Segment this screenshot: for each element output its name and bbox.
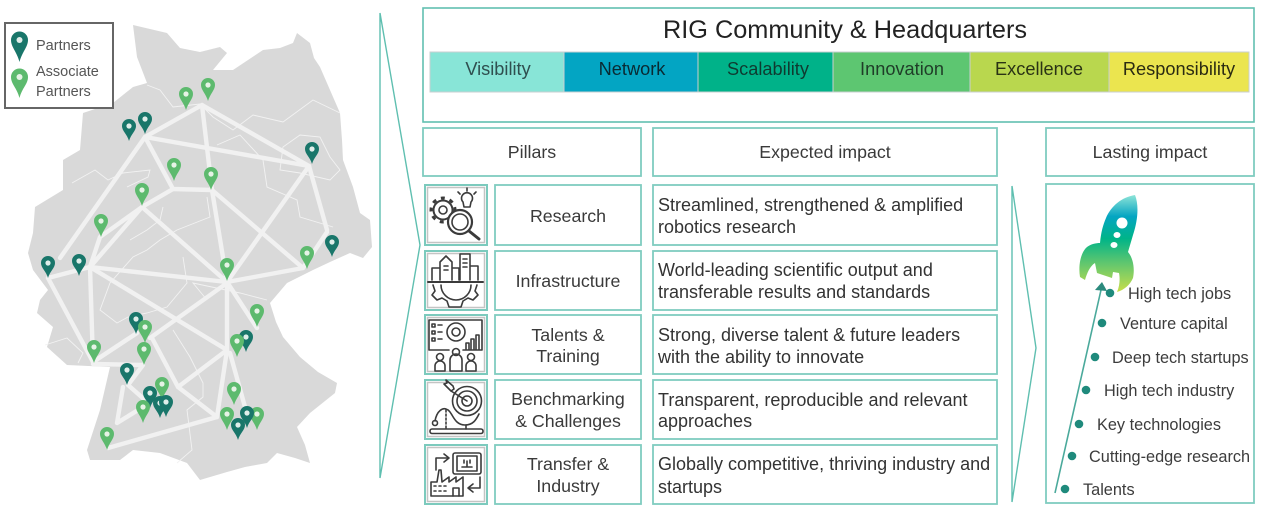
impact text: robotics research bbox=[658, 217, 796, 237]
list: lasting impact items: High tech industry bbox=[1104, 382, 1235, 400]
impact text bbox=[653, 445, 997, 504]
arrow: growth bbox=[1055, 282, 1107, 493]
arrow: map to community chevron bbox=[380, 13, 420, 478]
impact text: approaches bbox=[658, 411, 752, 431]
values bar: Network bbox=[599, 59, 666, 79]
legend labels: Associate bbox=[36, 64, 99, 80]
label: Infrastructure bbox=[516, 271, 620, 291]
heading: Expected impact: Expected impact bbox=[759, 142, 891, 162]
partner pins bbox=[41, 78, 339, 450]
values bar: Visibility bbox=[465, 59, 532, 79]
label: Talents & bbox=[531, 325, 605, 345]
icon: research bbox=[425, 185, 487, 245]
list: lasting impact items: Deep tech startups bbox=[1112, 349, 1249, 367]
heading: Pillars bbox=[423, 128, 641, 176]
impact text: transferable results and standards bbox=[658, 282, 930, 302]
values bar: Excellence bbox=[995, 59, 1083, 79]
label bbox=[495, 185, 641, 245]
icon: associate partner pin bbox=[11, 68, 28, 98]
heading: Expected impact bbox=[653, 128, 997, 176]
row: Research bbox=[425, 185, 997, 245]
impact text: startups bbox=[658, 477, 722, 497]
list: lasting impact items bbox=[1061, 285, 1250, 499]
label bbox=[495, 380, 641, 439]
icon: partner pin bbox=[11, 32, 28, 62]
impact text: Strong, diverse talent & future leaders bbox=[658, 325, 960, 345]
network lines bbox=[48, 105, 327, 448]
heading: Lasting impact: Lasting impact bbox=[1093, 142, 1207, 162]
row: Infrastructure bbox=[425, 251, 997, 310]
list: lasting impact items: Key technologies bbox=[1097, 416, 1221, 434]
row: Talents & Training bbox=[425, 315, 997, 374]
list: lasting impact items: Venture capital bbox=[1120, 315, 1228, 333]
values bar: Scalability bbox=[727, 59, 810, 79]
values bar: Innovation bbox=[860, 59, 944, 79]
values bar: Responsibility bbox=[1123, 59, 1236, 79]
label bbox=[495, 445, 641, 504]
legend labels: Partners bbox=[36, 38, 91, 54]
label: Training bbox=[536, 346, 600, 366]
values bar bbox=[430, 52, 1249, 92]
impact text: Globally competitive, thriving industry and bbox=[658, 454, 990, 474]
panel: RIG Community & Headquarters bbox=[423, 8, 1254, 122]
arrow: impact chevron bbox=[1012, 186, 1036, 502]
impact text: Streamlined, strengthened & amplified bbox=[658, 195, 963, 215]
icon: transfer and industry bbox=[425, 445, 487, 504]
heading: Pillars: Pillars bbox=[508, 142, 556, 162]
label: Transfer & bbox=[527, 454, 609, 474]
icon: rocket bbox=[1079, 195, 1137, 292]
heading: Lasting impact bbox=[1046, 128, 1254, 176]
label: Research bbox=[530, 206, 606, 226]
icon: infrastructure bbox=[425, 251, 487, 310]
map of Germany bbox=[28, 25, 372, 480]
legend bbox=[5, 23, 113, 108]
label: Industry bbox=[536, 476, 600, 496]
label: Benchmarking bbox=[511, 389, 625, 409]
panel: lasting impact bbox=[1046, 184, 1254, 503]
label bbox=[495, 315, 641, 374]
label: & Challenges bbox=[515, 411, 621, 431]
title: RIG Community & Headquarters bbox=[663, 16, 1027, 44]
list: lasting impact items: Talents bbox=[1083, 481, 1135, 499]
map landmass bbox=[28, 25, 372, 480]
state borders bbox=[45, 85, 340, 463]
label bbox=[495, 251, 641, 310]
row: Benchmarking & Challenges bbox=[425, 380, 997, 439]
impact text: Transparent, reproducible and relevant bbox=[658, 390, 968, 410]
list: lasting impact items: High tech jobs bbox=[1128, 285, 1231, 303]
list: lasting impact items: Cutting-edge research bbox=[1089, 448, 1250, 466]
impact text bbox=[653, 185, 997, 245]
impact text bbox=[653, 251, 997, 310]
impact text bbox=[653, 315, 997, 374]
icon: talents and training bbox=[425, 315, 487, 374]
impact text bbox=[653, 380, 997, 439]
impact text: World-leading scientific output and bbox=[658, 260, 933, 280]
row: Transfer & Industry bbox=[425, 445, 997, 504]
icon: benchmarking bbox=[425, 380, 487, 439]
impact text: with the ability to innovate bbox=[657, 347, 864, 367]
legend labels: Partners bbox=[36, 84, 91, 100]
